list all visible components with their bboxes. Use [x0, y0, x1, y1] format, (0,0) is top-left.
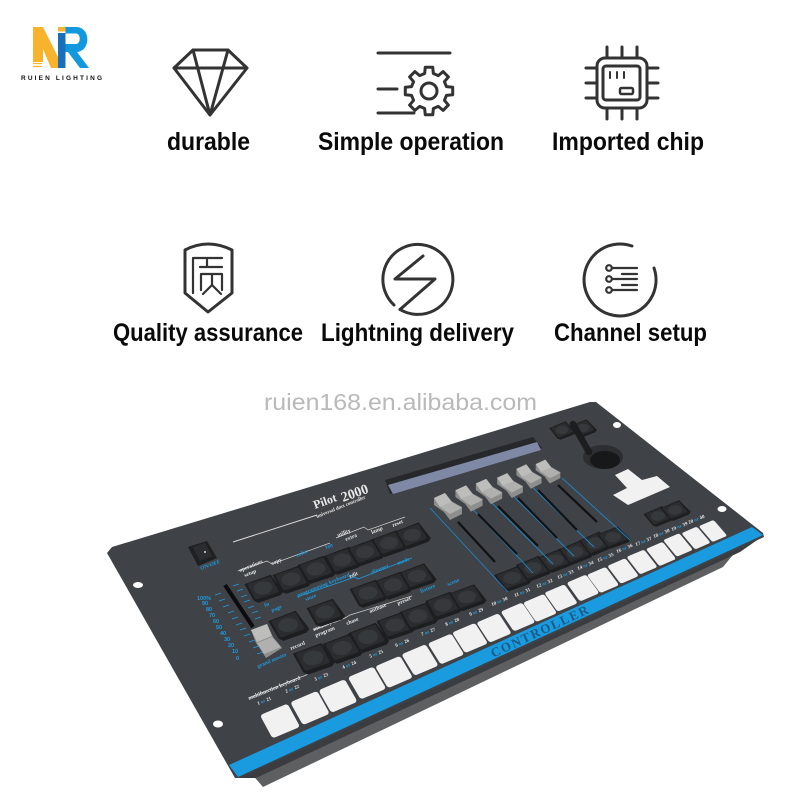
- key number labels: 3 or 23: [314, 673, 330, 683]
- heading: imported chip: Imported chip: [552, 128, 704, 156]
- button labels and brackets: multifunction keyboard: [248, 675, 301, 702]
- icon: diamond: [174, 50, 247, 115]
- master fader: 10: [232, 649, 238, 655]
- button labels and brackets: programming keyboard: [297, 572, 351, 599]
- brand: Pilot 2000: Pilot: [311, 490, 339, 512]
- controller device: [107, 402, 764, 787]
- master fader: 70: [209, 613, 215, 619]
- key number labels: 10 or 30: [491, 597, 509, 608]
- key number labels: 11 or 31: [514, 588, 532, 599]
- master fader: 50: [216, 625, 222, 631]
- button labels and brackets: fixture: [420, 583, 437, 595]
- button labels and brackets: chase: [346, 616, 360, 627]
- button labels and brackets: record: [290, 640, 306, 652]
- button labels and brackets: page: [271, 604, 283, 614]
- button labels and brackets: store: [305, 593, 318, 603]
- key number labels: 7 or 27: [421, 628, 437, 638]
- master fader: 30: [224, 637, 230, 643]
- brand: Pilot 2000: [233, 482, 371, 542]
- button labels and brackets: reset: [392, 519, 404, 529]
- button labels and brackets: utility: [337, 528, 352, 539]
- button labels and brackets: preset: [397, 596, 412, 607]
- panel: [107, 402, 764, 778]
- button labels and brackets: fn: [264, 601, 270, 609]
- icon: quality shield: [185, 244, 232, 312]
- key number labels: 18 or 38: [653, 529, 671, 540]
- button labels and brackets: color: [296, 549, 309, 559]
- icon: gear with lines: [378, 53, 453, 115]
- multifunction white keys: [260, 520, 727, 738]
- button labels and brackets: mode: [397, 556, 411, 567]
- watermark: ruien168.en.alibaba.com: [264, 389, 537, 415]
- power switch: ON/OFF: [200, 559, 222, 572]
- master fader: 20: [228, 643, 234, 649]
- button labels and brackets: memory chz: [313, 616, 342, 633]
- key number labels: 17 or 37: [635, 537, 653, 548]
- button labels and brackets: dimmer: [371, 563, 391, 576]
- key number labels: 5 or 25: [369, 650, 385, 660]
- icon: channel setup: [584, 244, 656, 316]
- joystick: [573, 424, 623, 469]
- icon: chip: [586, 47, 658, 119]
- button labels and brackets: operations: [239, 559, 264, 574]
- button labels and brackets: lamp: [371, 526, 384, 536]
- button labels and brackets: [238, 517, 461, 702]
- master fader: 100%: [197, 596, 211, 602]
- key number labels: 6 or 26: [395, 639, 411, 649]
- key number labels: 13 or 33: [557, 570, 575, 581]
- button labels and brackets: extra: [345, 533, 358, 543]
- master fader: [197, 584, 288, 670]
- button labels and brackets: edit: [349, 571, 359, 580]
- chassis: [237, 536, 763, 787]
- key number labels: 16 or 36: [616, 544, 634, 555]
- key number labels: 14 or 34: [577, 561, 595, 572]
- master fader: 60: [213, 619, 219, 625]
- key number labels: 1 or 21: [257, 697, 273, 707]
- brand: Pilot 2000: universal dmx controller: [316, 495, 367, 520]
- key number labels: 12 or 32: [536, 579, 554, 590]
- button labels and brackets: program: [315, 625, 336, 639]
- key number labels: 19 or 39: [671, 522, 689, 533]
- key number labels: 4 or 24: [342, 661, 358, 671]
- button labels and brackets: copy: [271, 557, 283, 567]
- logo: [21, 27, 102, 82]
- key number labels: 2 or 22: [285, 685, 301, 695]
- logo: RUIEN LIGHTING: [21, 75, 102, 82]
- key number labels: 9 or 29: [469, 608, 485, 618]
- button labels and brackets: scene: [447, 577, 461, 588]
- power switch: [188, 541, 222, 572]
- master fader: grand master: [256, 652, 288, 670]
- heading: durable: durable: [167, 128, 250, 156]
- blue band: [229, 527, 763, 777]
- band label: CONTROLLER: [488, 601, 592, 660]
- key number labels: 20 or 40: [688, 515, 706, 526]
- white direction keys: [613, 469, 670, 505]
- master fader: 40: [220, 631, 226, 637]
- brand: Pilot 2000: 2000: [339, 482, 371, 506]
- button labels and brackets: autbase: [369, 602, 388, 615]
- master fader: 80: [206, 607, 212, 613]
- button labels and brackets: setup: [244, 569, 257, 579]
- heading: channel setup: Channel setup: [554, 319, 707, 347]
- heading: lightning delivery: Lightning delivery: [321, 319, 514, 347]
- key number labels: 8 or 28: [445, 618, 461, 628]
- mounting holes: [133, 422, 726, 728]
- master fader: 0: [236, 656, 239, 662]
- heading: quality assurance: Quality assurance: [113, 319, 303, 347]
- key number labels: [257, 515, 706, 707]
- icon: lightning circle: [383, 244, 453, 314]
- button labels and brackets: fan: [325, 542, 334, 551]
- master fader: 90: [202, 601, 208, 607]
- channel faders: [430, 460, 630, 592]
- LCD display: [385, 437, 542, 494]
- dark buttons: [244, 419, 692, 676]
- key number labels: 15 or 35: [597, 553, 615, 564]
- heading: simple operation: Simple operation: [318, 128, 504, 156]
